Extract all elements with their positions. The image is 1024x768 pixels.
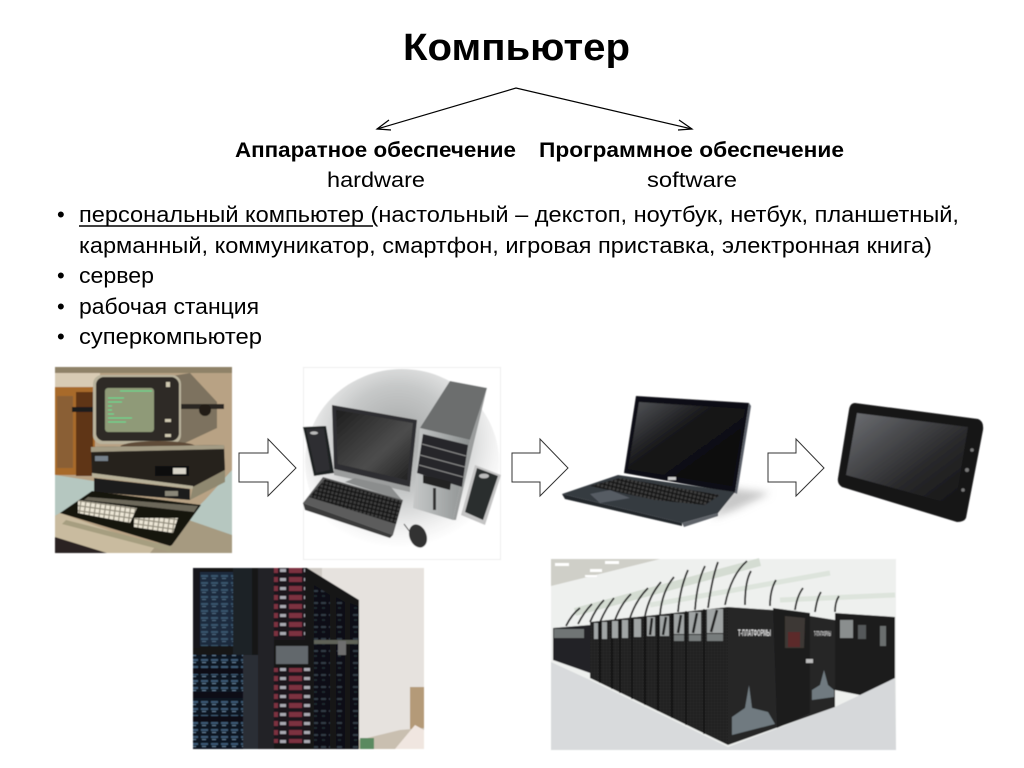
heading: hardware: Аппаратное обеспечение bbox=[235, 139, 516, 162]
back-right rack row bbox=[835, 613, 895, 695]
photo: desktop computer bbox=[303, 368, 501, 560]
bullet list of computer types bbox=[57, 202, 959, 349]
photo: laptop bbox=[562, 396, 770, 527]
title: Компьютер bbox=[403, 27, 630, 69]
tower bbox=[420, 381, 487, 440]
heading: hardware bbox=[235, 139, 516, 192]
keyboard bbox=[303, 477, 403, 535]
main rack row: left face bbox=[590, 607, 728, 745]
bullet list of computer types: • bbox=[57, 202, 65, 227]
main rack row: right face bbox=[728, 607, 835, 745]
arrow: laptop to tablet bbox=[768, 439, 824, 496]
photo: supercomputer: Т-ПЛАТФОРМЫ bbox=[738, 628, 771, 638]
speakers bbox=[303, 426, 334, 476]
photo: supercomputer bbox=[551, 559, 896, 750]
bullet list of computer types: суперкомпьютер bbox=[79, 324, 262, 349]
mouse bbox=[404, 524, 413, 536]
heading: software bbox=[539, 139, 844, 192]
heading: hardware: hardware bbox=[327, 169, 425, 192]
arrow: early PC to desktop bbox=[239, 439, 296, 496]
photo: early personal computer bbox=[55, 367, 232, 553]
keyboard bbox=[60, 491, 201, 546]
monitor bbox=[172, 373, 217, 443]
monitor bbox=[332, 405, 417, 487]
back-left rack row bbox=[553, 625, 590, 673]
bullet list of computer types: • bbox=[57, 263, 65, 288]
bullet list of computer types: карманный, коммуникатор, смартфон, игровая приставка, электронная книга) bbox=[79, 233, 932, 258]
bullet list of computer types: сервер bbox=[79, 263, 154, 288]
heading: software: software bbox=[647, 169, 737, 192]
photo: server racks bbox=[193, 568, 424, 749]
arrow: desktop to laptop bbox=[512, 439, 568, 496]
bullet list of computer types: персональный компьютер (настольный – декстоп, ноутбук, нетбук, планшетный, bbox=[79, 202, 959, 227]
arrows: branching from title bbox=[377, 88, 692, 130]
bullet list of computer types: • bbox=[57, 324, 65, 349]
bullet list of computer types: рабочая станция bbox=[79, 294, 259, 319]
heading: software: Программное обеспечение bbox=[539, 139, 844, 162]
photo: tablet bbox=[838, 403, 983, 522]
bullet list of computer types: • bbox=[57, 294, 65, 319]
overhead trays and cables bbox=[575, 562, 760, 612]
photo: supercomputer: Т-ПЛАТФОРМЫ bbox=[814, 631, 831, 638]
system units bbox=[91, 445, 225, 487]
